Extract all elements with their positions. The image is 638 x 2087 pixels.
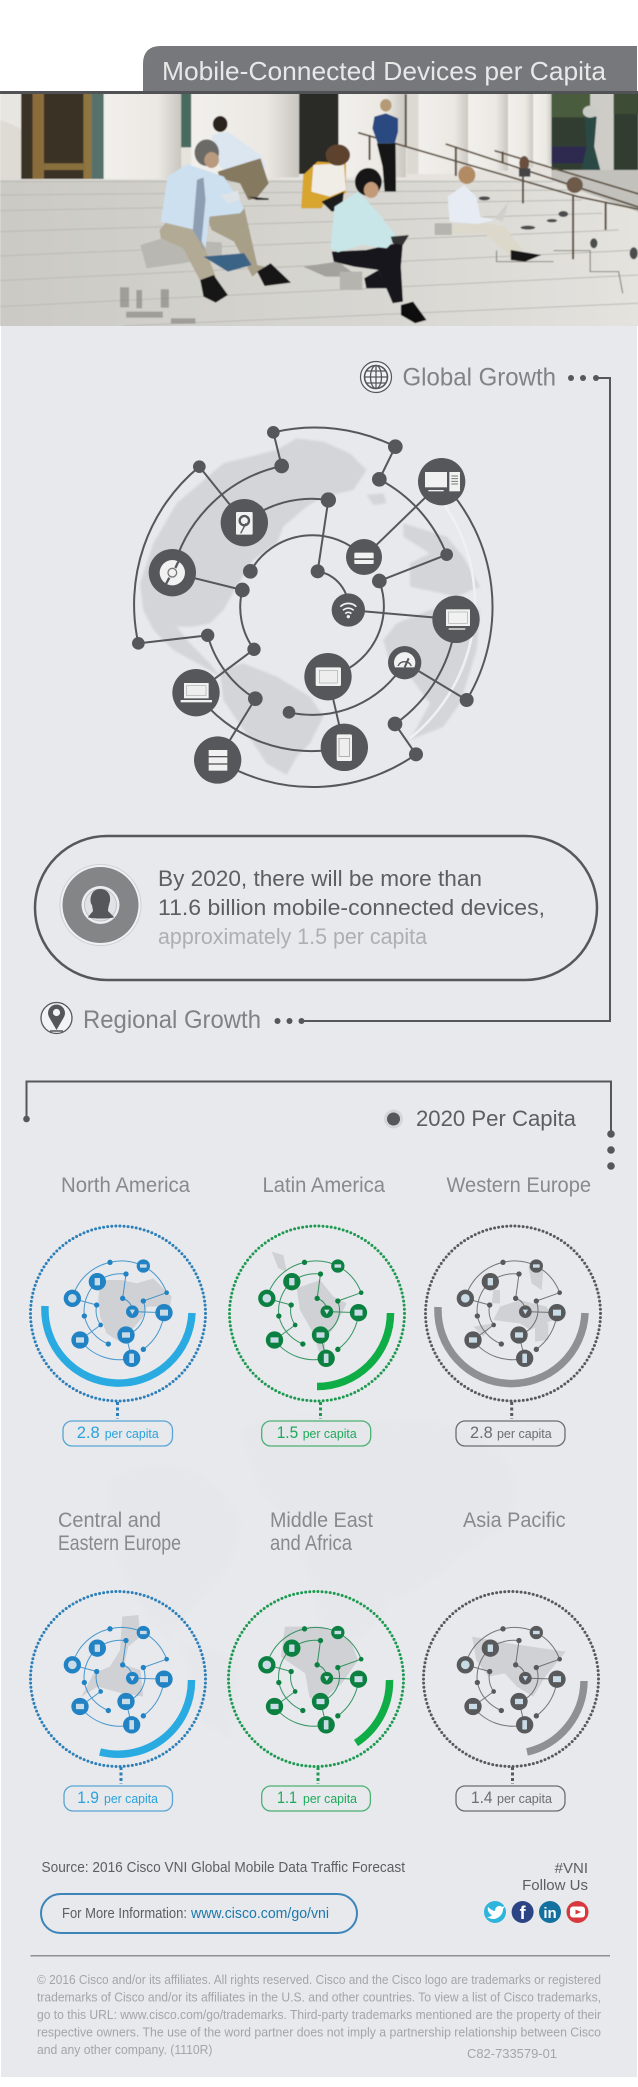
section heading: Global Growth: [360, 362, 599, 392]
icon: person avatar: [60, 864, 141, 946]
icon: disc: [149, 549, 196, 596]
section heading: Regional Growth: [41, 1002, 304, 1034]
callout text: [158, 866, 545, 949]
value pill: 2.8: [77, 1423, 100, 1442]
photo: people using devices on courthouse steps: [0, 90, 638, 330]
document code: C82-733579-01: [467, 2046, 557, 2061]
value pill: [456, 1786, 565, 1811]
value pill: per capita: [104, 1791, 159, 1806]
network icon: [64, 1626, 173, 1733]
legal text: [37, 1972, 602, 2057]
map: Western Europe: [473, 1267, 553, 1342]
dappled shadow: [120, 287, 195, 324]
value pill: per capita: [303, 1426, 357, 1441]
region title: Middle East: [270, 1509, 373, 1532]
social icons: [484, 1901, 588, 1923]
network icon: [64, 1259, 173, 1367]
network links: [134, 428, 493, 787]
panel: Asia Pacific: [424, 1509, 598, 1811]
value arc: [45, 1306, 192, 1383]
heading text: Regional Growth: [83, 1006, 261, 1034]
icon: linkedin: in: [543, 1905, 557, 1922]
icon: globe: [360, 362, 392, 392]
dotted ring: [230, 1226, 404, 1401]
icon: set-top box: [346, 539, 382, 575]
source line: Source: 2016 Cisco VNI Global Mobile Data Traffic Forecast: [42, 1859, 406, 1876]
pigeons: [479, 196, 638, 259]
stairs: [0, 180, 638, 330]
dotted ring: [228, 1592, 404, 1766]
network icon: [258, 1626, 367, 1733]
value pill: per capita: [497, 1791, 553, 1806]
globe land masses: [140, 438, 480, 775]
man behind: [212, 116, 269, 200]
man centre with tablet: [330, 168, 427, 323]
region title: Eastern Europe: [58, 1532, 181, 1555]
map: North America: [98, 1278, 172, 1343]
hashtag and follow us: #VNI: [555, 1860, 588, 1877]
connector: [316, 1767, 320, 1784]
callout pill: 11.6 billion devices: [35, 836, 597, 980]
icon: tablet: [304, 653, 352, 700]
region title: Latin America: [262, 1174, 385, 1197]
value arc: [356, 1680, 390, 1743]
man with laptop: [435, 166, 541, 262]
map: Middle East and Africa: [281, 1627, 358, 1710]
man with grey hair: [160, 139, 291, 303]
region title: Western Europe: [446, 1174, 591, 1197]
panel: Latin America: [230, 1174, 404, 1446]
subheading: 2020 Per Capita: 2020 Per Capita: [416, 1106, 577, 1131]
more information pill: [41, 1894, 357, 1933]
value pill: 1.1: [277, 1788, 297, 1807]
value pill: 1.4: [471, 1788, 492, 1807]
icon: monitor: [432, 596, 480, 643]
map: Central and Eastern Europe: [81, 1615, 143, 1697]
callout text: By 2020, there will be more than: [158, 866, 482, 891]
network icon: [457, 1259, 566, 1367]
legal text: and any other company. (1110R): [37, 2042, 212, 2057]
value pill: [262, 1786, 370, 1811]
faint world map background: [108, 1416, 516, 1740]
connector: [120, 1767, 122, 1784]
panel: Middle East and Africa: [228, 1509, 404, 1811]
hashtag and follow us: [522, 1860, 588, 1894]
icon: wifi: [332, 593, 365, 627]
distant people: [519, 156, 583, 193]
divider: [30, 1955, 610, 1956]
panel: North America: [30, 1174, 206, 1446]
value pill: [63, 1421, 172, 1446]
value arc: [438, 1307, 585, 1384]
connector dots: [274, 1018, 304, 1024]
connector: [116, 1402, 119, 1419]
icon: facebook: f: [520, 1903, 527, 1923]
connector dots: [568, 375, 599, 381]
region title: and Africa: [270, 1532, 352, 1555]
heading text: Global Growth: [402, 364, 556, 392]
panel: Central and Eastern Europe: [30, 1509, 206, 1811]
icon: gauge: [388, 646, 421, 679]
bracket frame: 2020 per capita section: [23, 1082, 615, 1170]
icon: youtube: [566, 1901, 588, 1923]
icon: server: [194, 736, 241, 784]
value pill: per capita: [105, 1426, 159, 1441]
region title: North America: [61, 1174, 190, 1197]
connector: [510, 1402, 513, 1419]
dotted ring: [426, 1226, 600, 1401]
icon: laptop: [172, 669, 220, 716]
railings: [358, 94, 638, 259]
icon: desktop computer: [418, 458, 465, 505]
network icon: [258, 1259, 367, 1367]
legal text: © 2016 Cisco and/or its affiliates. All rights reserved. Cisco and the Cisco logo are trademarks or registered: [37, 1972, 601, 1987]
map: Latin America: [272, 1252, 347, 1360]
value pill: per capita: [497, 1426, 552, 1441]
region title: [58, 1509, 181, 1555]
value pill: 1.5: [277, 1423, 298, 1442]
more information pill: For More Information:: [62, 1906, 187, 1922]
region title: [270, 1509, 373, 1555]
value pill: [262, 1421, 371, 1446]
hashtag and follow us: Follow Us: [522, 1877, 588, 1894]
woman standing: [372, 99, 398, 192]
dotted ring: [30, 1226, 206, 1401]
dotted ring: [30, 1592, 206, 1766]
icon: hard drive: [221, 499, 268, 546]
value pill: 1.9: [77, 1788, 99, 1807]
value pill: [456, 1421, 565, 1446]
network diagram: devices over globe: [132, 426, 493, 787]
network icon: [457, 1626, 566, 1733]
value pill: per capita: [303, 1791, 358, 1806]
icon: map pin: [41, 1002, 72, 1034]
legal text: respective owners. The use of the word partner does not imply a partnership relationship between Cisco: [37, 2024, 601, 2040]
title: Mobile-Connected Devices per Capita: [162, 56, 607, 86]
woman sitting: [301, 144, 350, 212]
connector: [511, 1767, 514, 1784]
title tab: [0, 46, 638, 94]
connector: [319, 1402, 322, 1419]
region title: Central and: [58, 1509, 161, 1532]
callout text: 11.6 billion mobile-connected devices,: [158, 895, 545, 920]
value arc: [100, 1680, 192, 1754]
connector line: global to regional: [301, 378, 610, 1021]
value pill: [64, 1786, 172, 1811]
dotted ring: [424, 1592, 598, 1766]
icon: twitter: [484, 1901, 506, 1923]
value arc: [527, 1681, 584, 1752]
network nodes: [132, 426, 474, 761]
panel: Western Europe: [426, 1174, 600, 1446]
value arc: [317, 1313, 390, 1386]
map: Asia Pacific: [472, 1637, 566, 1697]
legal text: go to this URL: www.cisco.com/go/trademarks. Third-party trademarks mentioned are the property of their: [37, 2007, 602, 2022]
more information pill: www.cisco.com/go/vni: [190, 1906, 329, 1922]
icon: smartphone: [321, 724, 368, 771]
callout text: approximately 1.5 per capita: [158, 924, 428, 949]
region title: Asia Pacific: [463, 1509, 566, 1532]
legal text: trademarks of Cisco and/or its affiliates in the U.S. and other countries. To view a list of Cisco trademarks,: [37, 1990, 601, 2004]
value pill: 2.8: [470, 1423, 493, 1442]
